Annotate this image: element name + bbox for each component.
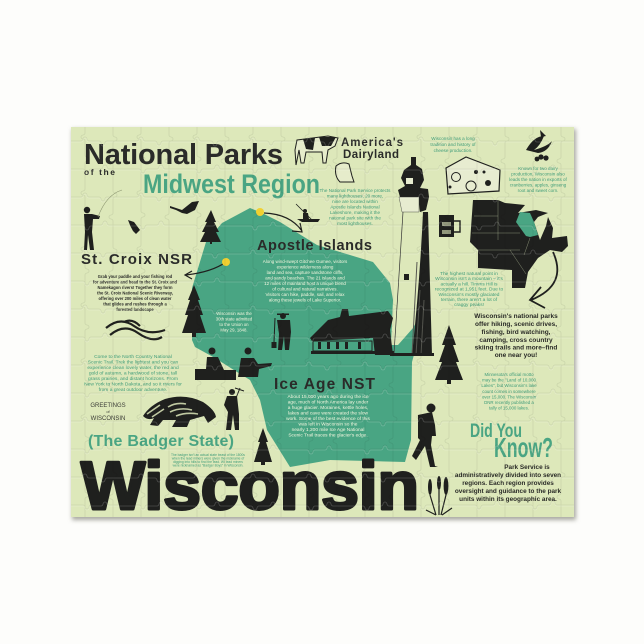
text: did you know: Know? <box>494 432 553 463</box>
text: parks summary: fishing, bird watching, <box>482 329 551 336</box>
text: cheese history: tradition and history of <box>430 142 476 147</box>
text: lakes: Lakes", but Wisconsin's lake <box>481 383 537 388</box>
text: lighthouses: many lighthouses, 20 more, <box>327 194 383 198</box>
text: lakes: DNR recently published a <box>484 400 534 405</box>
icon: lighthouse keeper house <box>310 309 394 355</box>
text: statehood: May 29, 1848. <box>220 328 248 332</box>
icon: tree left <box>182 285 206 337</box>
text: statehood: to the Union on <box>219 322 249 327</box>
text: The Badger State: (The Badger State) <box>88 433 234 450</box>
text: parks summary: Wisconsin's national parks <box>474 313 558 320</box>
icon: cow <box>295 136 338 165</box>
St. Croix section: Grab your paddle and your fishing rod <box>98 274 173 279</box>
Apostle Islands section: land and sea, capture sandstone cliffs, <box>267 270 343 275</box>
text: highest point: recognized at 1,951 feet. Due to <box>435 287 503 293</box>
Ice Age section: work. Some of the best evidence of this <box>286 416 370 422</box>
text: did you know: units within its geographic area. <box>459 496 557 503</box>
text: greetings: of <box>106 409 111 414</box>
text: lighthouses: most lighthouses. <box>337 221 373 226</box>
icon: cheese <box>446 157 500 194</box>
St. Croix section: St. Croix NSR <box>81 251 192 268</box>
icon: walking hiker <box>412 404 438 467</box>
text: North Country trail: gold of autumn, a hardwood of stone, tall <box>89 370 177 376</box>
text: lakes: may be the "Land of 10,000 <box>482 378 536 383</box>
St. Croix section <box>81 251 192 312</box>
marker: Apostle Islands with arrow <box>256 208 302 232</box>
Ice Age section: nearly 1,200 mile Ice Age National <box>292 427 364 433</box>
midwest region map <box>470 200 568 288</box>
Ice Age section: Scenic Trail traces the glacier's edge. <box>288 432 368 438</box>
text: cheese history: cheese production. <box>434 148 472 153</box>
text: lighthouses: nine are located within <box>332 199 378 204</box>
text: cheese history: Wisconsin has a long <box>431 136 475 141</box>
Ice Age section: a huge glacier. Moraines, kettle holes, <box>288 405 368 411</box>
text: did you know: oversight and guidance to the park <box>455 488 562 495</box>
Apostle Islands section: 12 miles of mainland host a unique blend <box>264 281 346 286</box>
text: highest point: actually a hill. Timms Hill is <box>440 281 498 287</box>
Ice Age section: About 15,000 years ago during the ice <box>287 394 369 400</box>
text: badger note: were nicknamed as "Badger Boys" in Wisconsin. <box>173 464 244 468</box>
text: America's Dairyland: America's <box>341 137 403 149</box>
Apostle Islands section: of cultural and natural narratives. <box>272 286 338 292</box>
icon: fisherman <box>84 190 122 250</box>
text: parks summary: skiing trails and more–find <box>475 344 557 352</box>
St. Croix section: forested landscape <box>116 307 154 312</box>
Ice Age section: Ice Age NST <box>274 376 376 393</box>
text: did you know: administratively divided into seven <box>455 472 561 479</box>
text: greetings: WISCONSIN <box>91 416 125 422</box>
text: greetings: GREETINGS <box>90 403 126 409</box>
Ice Age section: lakes and cave were created the slow <box>288 410 369 416</box>
Apostle Islands section: experience wilderness along <box>277 264 334 270</box>
poster background panel <box>71 127 574 517</box>
Ice Age section <box>274 376 376 438</box>
text: statehood: 30th state admitted <box>216 316 253 322</box>
text: exports: leads the nation in exports of <box>509 177 568 182</box>
text: badger note: The badger isn't an actual state beast of the 1800s <box>171 453 245 457</box>
text: did you know <box>455 421 562 503</box>
text: lighthouses: Lakeshore, making it the <box>330 210 380 215</box>
icon: berries <box>526 130 552 161</box>
icon: eagle <box>170 201 199 214</box>
St. Croix section: Namekagon rivers! Together they form <box>98 285 173 290</box>
text: lighthouses: Apostle Islands National <box>330 204 380 210</box>
St. Croix section: offering over 200 miles of clean water <box>98 296 172 301</box>
Apostle Islands section <box>257 238 372 302</box>
icon: water waves <box>106 321 165 339</box>
text: North Country trail: Scenic Trail. Trek the lightest and you can <box>88 360 179 366</box>
icon: fish <box>128 220 140 234</box>
text: statehood: Wisconsin was the <box>216 311 252 316</box>
text: parks summary: camping, cross country <box>479 337 553 344</box>
text: exports: production, Wisconsin also <box>511 172 565 176</box>
arrow from map to text <box>530 252 557 308</box>
icon: tree top <box>200 210 221 244</box>
icon: beer mug <box>439 215 460 237</box>
Apostle Islands section: Along wind-swept Gitchee Gumee, visitors <box>263 259 348 264</box>
big Wisconsin title: Wisconsin <box>81 448 419 524</box>
main title: National Parks <box>84 139 283 171</box>
icon: tree right <box>435 325 463 384</box>
text: lakes: count comes in somewhere <box>482 389 536 394</box>
Ice Age section: was left in Wisconsin so the <box>299 422 358 428</box>
text: North Country trail: from a great outdoor adventure. <box>99 387 167 393</box>
text: North Country trail: experience clean lovely water, the red and <box>87 365 179 371</box>
icon: seated hikers <box>195 348 272 380</box>
text: did you know: regions. Each region provides <box>462 480 554 487</box>
icon: cattails <box>426 476 452 515</box>
text: lighthouses: The National Park Service protects <box>320 188 391 193</box>
Apostle Islands section: Apostle Islands <box>257 238 372 254</box>
text: parks summary: offer hiking, scenic drives, <box>475 321 557 328</box>
Apostle Islands section: Visitors can hike, paddle, sail, and relax <box>266 292 345 297</box>
text: North Country trail: Come to the North Country National <box>94 354 172 360</box>
text: lakes: Minnesota's official motto <box>484 372 534 377</box>
icon: tree bottom <box>254 428 272 465</box>
text: America's Dairyland: Dairyland <box>343 149 399 161</box>
marker: St. Croix with arrow <box>185 258 230 279</box>
text: highest point: craggy peaks! <box>454 302 484 308</box>
text: exports: root and sweet corn. <box>518 188 558 193</box>
text: highest point: The highest natural point in <box>440 271 498 277</box>
text: badger note: digging into hills to find the lead. WI lead miners <box>173 460 243 464</box>
icon: kayaker <box>296 204 320 222</box>
main title: Midwest Region <box>143 169 320 199</box>
main title <box>84 139 320 199</box>
text: parks summary: one near you! <box>495 352 537 359</box>
text: North Country trail: New York to North Dakota, and so it rivers for <box>84 382 182 388</box>
text: highest point: Wisconsin isn't a mountain – it's <box>435 276 503 282</box>
icon: badger <box>143 397 216 427</box>
main title: of the <box>84 167 115 177</box>
poster shadow <box>72 129 576 520</box>
text: highest point: terrain, there aren't a lot of <box>441 297 498 303</box>
icon: ranger with shovel <box>272 313 291 350</box>
icon: lighthouse <box>390 157 434 356</box>
icon: miner with pickaxe <box>224 388 244 430</box>
text: lakes: tally of 15,000 lakes. <box>489 406 529 411</box>
Ice Age section: age, much of North America lay under <box>288 400 369 406</box>
text: greetings <box>90 403 126 422</box>
text: exports: Known for two dairy <box>518 166 559 171</box>
text: exports: cranberries, apples, ginseng <box>510 182 567 188</box>
text: did you know: Did You <box>470 421 522 442</box>
Apostle Islands section: and sandy beaches. The 21 islands and <box>265 276 345 280</box>
St. Croix section: the St. Croix National Scenic Riverway, <box>97 290 173 296</box>
Apostle Islands section: along these jewels of Lake Superior. <box>269 298 341 302</box>
text: lighthouses: national park site with the <box>329 216 381 220</box>
puzzle piece overlay <box>71 127 574 517</box>
Wisconsin state map <box>192 208 427 467</box>
St. Croix section: that glides and rushes through a <box>103 302 167 306</box>
text: highest point: Wisconsin's mostly glaciated <box>439 292 500 298</box>
text: North Country trail: grass prairies, and distant horizons. From <box>88 376 178 382</box>
text: lakes: over 15,000. The Wisconsin <box>482 394 537 399</box>
text: badger note: when the lead miners were given the nickname of <box>172 456 244 460</box>
St. Croix section: for adventure and head to the St. Croix and <box>93 280 177 284</box>
text: did you know: Park Service is <box>504 464 550 471</box>
icon: milker <box>336 163 354 182</box>
text: America's Dairyland <box>341 137 403 161</box>
